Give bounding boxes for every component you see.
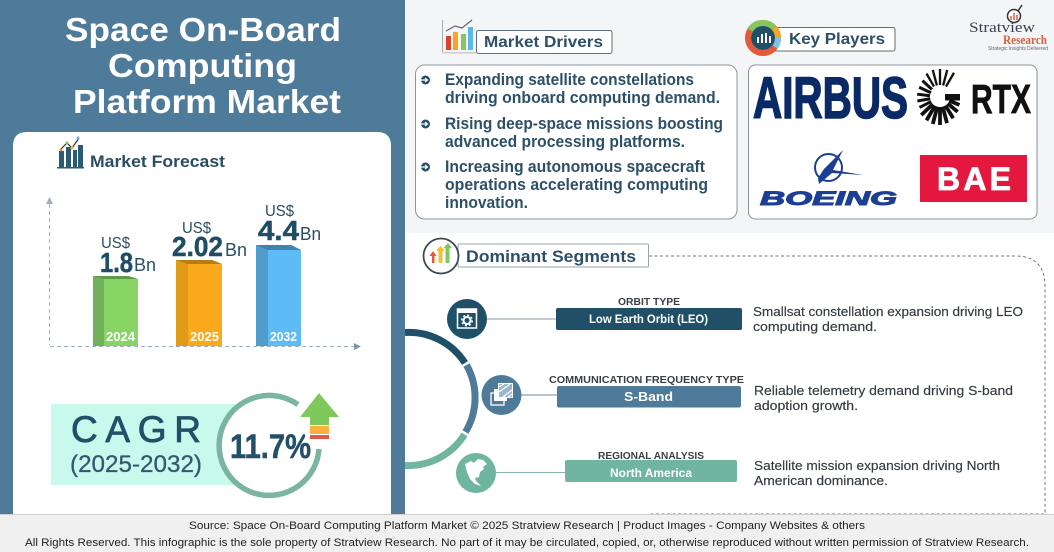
axes — [46, 197, 361, 350]
callout: CAGR — [51, 393, 339, 496]
panel: market forecast card — [13, 132, 391, 514]
logo: Boeing: BOEING — [760, 188, 897, 210]
logo: Stratview Research: Research — [1003, 32, 1048, 47]
segment text: region: Satellite mission expansion driving North — [754, 459, 1000, 473]
bar: 2032 — [256, 245, 301, 346]
bullet: satellite constellations — [420, 71, 720, 107]
icon: segments arrows — [424, 238, 458, 274]
logo: Stratview Research: Stratview — [969, 20, 1035, 36]
segment text: frequency — [754, 384, 1013, 413]
segment text: orbit: computing demand. — [753, 320, 877, 334]
bar: 2024 — [93, 276, 138, 346]
bullet: autonomous operations — [420, 158, 708, 212]
bullet: deep-space missions: Rising deep-space missions boosting — [445, 115, 723, 133]
bullet: satellite constellations: Expanding satellite constellations — [445, 71, 694, 89]
segment: regional analysis: North America — [610, 466, 692, 480]
value: 1.8: 1.8 — [100, 247, 133, 278]
segment text: frequency: Reliable telemetry demand driving S-band — [754, 384, 1013, 398]
title: Platform Market — [73, 84, 341, 121]
heading: dominant segments: Dominant Segments — [466, 248, 636, 266]
chart: forecast bars — [46, 197, 361, 350]
value: 1.8 — [100, 235, 156, 278]
heading: market drivers — [442, 20, 612, 54]
segment text: region: American dominance. — [754, 474, 888, 488]
segment: orbit type: Low Earth Orbit (LEO) — [589, 314, 708, 326]
footer — [0, 514, 1054, 552]
value: 4.4: Bn — [300, 224, 321, 244]
title — [65, 12, 341, 121]
value: 2.02: US$ — [182, 220, 211, 237]
segment: orbit type — [447, 296, 742, 339]
heading: dominant segments — [424, 238, 648, 274]
icon: north america map — [456, 453, 496, 493]
panel: dominant segments dashed frame — [648, 256, 1045, 514]
logo: BAE — [920, 155, 1027, 202]
bullet: deep-space missions — [420, 115, 723, 151]
logo: BAE: BAE — [937, 161, 1011, 197]
logo: Boeing — [760, 150, 897, 210]
title: Computing — [108, 48, 297, 85]
bullet: satellite constellations: driving onboard computing demand. — [445, 89, 720, 107]
title: Space On-Board — [65, 12, 341, 49]
panel: market drivers list — [416, 65, 737, 219]
callout: CAGR: 11.7% — [230, 428, 311, 466]
callout: CAGR: (2025-2032) — [70, 451, 202, 478]
bar: 2025 — [176, 260, 222, 346]
segment text: orbit — [753, 305, 1023, 334]
segment text: region — [754, 459, 1000, 488]
icon: drivers chart — [442, 20, 476, 54]
value: 2.02: 2.02 — [172, 231, 223, 262]
icon: key players donut — [748, 23, 778, 53]
logo: Stratview Research — [969, 5, 1048, 52]
value: 4.4 — [258, 203, 321, 246]
logo: Stratview Research: Strategic Insights Delivered — [988, 46, 1048, 52]
footer: All Rights Reserved. This infographic is the sole property of Stratview Research. No part of it may be circulated, copied, or, otherwise reproduced without written permission of Stratview Research. — [25, 537, 1029, 549]
segment: communication frequency type: S-Band — [624, 389, 673, 404]
segment: regional analysis — [456, 450, 737, 493]
logo: Airbus: AIRBUS — [753, 66, 908, 131]
segment: communication frequency type: COMMUNICATION FREQUENCY TYPE — [549, 374, 744, 386]
segment text: orbit: Smallsat constellation expansion driving LEO — [753, 305, 1023, 319]
icon: orbit window gear — [447, 299, 487, 339]
logo: RTX: RTX — [971, 76, 1031, 122]
bullet: autonomous operations: operations accelerating computing — [445, 176, 708, 194]
segment text: frequency: adoption growth. — [754, 399, 858, 413]
bar: 2025: 2025 — [190, 329, 219, 344]
segment: orbit type: ORBIT TYPE — [618, 296, 680, 308]
heading: market forecast: Market Forecast — [90, 152, 225, 171]
bullet: autonomous operations: innovation. — [445, 194, 528, 212]
segment: communication frequency type — [482, 374, 744, 415]
value: 1.8: US$ — [101, 235, 130, 252]
heading: market drivers: Market Drivers — [484, 34, 603, 51]
value: 4.4: 4.4 — [258, 215, 299, 246]
heading: key players — [748, 23, 895, 53]
panel: left title background — [0, 0, 405, 514]
value: 1.8: Bn — [134, 255, 156, 275]
icon: forecast chart — [57, 136, 84, 168]
bullet: autonomous operations: Increasing autonomous spacecraft — [445, 158, 705, 176]
icon: growth arrow — [300, 393, 339, 441]
value: 4.4: US$ — [265, 203, 294, 220]
panel: key players logos — [748, 65, 1037, 219]
bar: 2024: 2024 — [106, 329, 136, 344]
bar: 2032: 2032 — [270, 329, 297, 344]
logo: RTX — [917, 69, 1031, 125]
heading: key players: Key Players — [789, 31, 885, 48]
bullet: deep-space missions: advanced processing platforms. — [445, 133, 685, 151]
value: 2.02 — [172, 220, 247, 262]
icon: layered squares — [482, 375, 522, 415]
callout: CAGR: CAGR — [71, 409, 201, 450]
ring: segment arc — [405, 332, 475, 466]
value: 2.02: Bn — [225, 240, 247, 260]
segment: regional analysis: REGIONAL ANALYSIS — [598, 450, 704, 462]
footer: Source: Space On-Board Computing Platform Market © 2025 Stratview Research | Product Images - Company Websites & others — [189, 520, 866, 532]
